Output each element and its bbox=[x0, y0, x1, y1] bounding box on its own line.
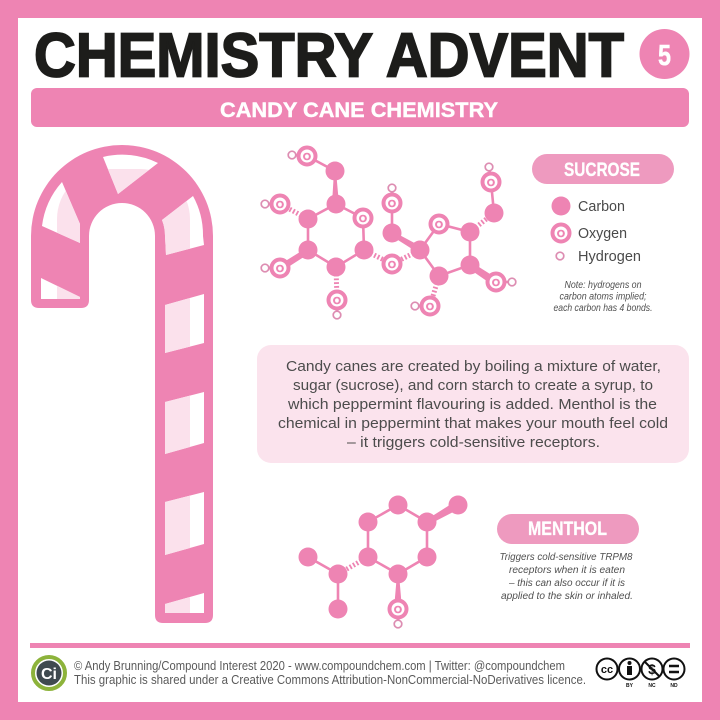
title: CHEMISTRY ADVENT bbox=[34, 20, 624, 90]
creative commons icons: NC bbox=[648, 683, 656, 689]
legend: oxygen bbox=[552, 224, 627, 242]
sucrose molecule: O bbox=[388, 259, 396, 271]
footer rule bbox=[30, 643, 690, 648]
description panel: – it triggers cold-sensitive receptors. bbox=[347, 434, 600, 451]
day number badge bbox=[640, 29, 690, 79]
menthol description bbox=[500, 552, 633, 602]
legend: oxygen: O bbox=[557, 228, 565, 240]
compound interest logo bbox=[33, 657, 65, 689]
subtitle banner: CANDY CANE CHEMISTRY bbox=[220, 99, 498, 122]
hydrogen note: Note: hydrogens on bbox=[564, 280, 642, 291]
description panel bbox=[257, 345, 689, 463]
legend: carbon: Carbon bbox=[578, 198, 625, 215]
sucrose molecule: O bbox=[303, 151, 311, 163]
sucrose molecule: O bbox=[426, 301, 434, 313]
sucrose molecule: O bbox=[333, 295, 341, 307]
credit text: © Andy Brunning/Compound Interest 2020 - www.compoundchem.com | Twitter: @compoundchem bbox=[74, 659, 565, 673]
menthol label pill bbox=[497, 514, 639, 544]
sucrose molecule: O bbox=[388, 198, 396, 210]
legend bbox=[552, 196, 641, 265]
menthol label pill: MENTHOL bbox=[528, 519, 607, 540]
sucrose molecule: O bbox=[435, 219, 443, 231]
candy cane illustration bbox=[31, 145, 213, 623]
compound interest logo: Ci bbox=[41, 666, 57, 683]
sucrose molecule: O bbox=[359, 213, 367, 225]
creative commons icons: cc bbox=[601, 664, 613, 676]
subtitle banner bbox=[31, 88, 689, 127]
day number badge: 5 bbox=[658, 40, 671, 72]
hydrogen note bbox=[554, 280, 652, 314]
menthol molecule bbox=[298, 496, 468, 628]
credit text: This graphic is shared under a Creative Commons Attribution-NonCommercial-NoDerivatives licence. bbox=[74, 673, 586, 687]
hydrogen note: each carbon has 4 bonds. bbox=[554, 303, 652, 314]
description panel: Candy canes are created by boiling a mixture of water, bbox=[286, 358, 661, 375]
sucrose label pill: SUCROSE bbox=[564, 160, 640, 181]
legend: oxygen: Oxygen bbox=[578, 225, 627, 242]
description panel: sugar (sucrose), and corn starch to create a syrup, to bbox=[293, 377, 653, 394]
menthol description: – this can also occur if it is bbox=[508, 578, 625, 589]
creative commons icons: ND bbox=[670, 683, 678, 689]
sucrose molecule bbox=[261, 148, 516, 319]
sucrose molecule: O bbox=[276, 199, 284, 211]
creative commons icons bbox=[596, 658, 684, 689]
sucrose molecule: O bbox=[487, 177, 495, 189]
hydrogen note: carbon atoms implied; bbox=[560, 292, 647, 302]
menthol description: Triggers cold-sensitive TRPM8 bbox=[500, 552, 633, 563]
sucrose molecule: O bbox=[492, 277, 500, 289]
creative commons icons: BY bbox=[626, 683, 634, 689]
menthol description: receptors when it is eaten bbox=[509, 565, 625, 576]
sucrose label pill bbox=[532, 154, 674, 184]
sucrose molecule: O bbox=[276, 263, 284, 275]
description panel: chemical in peppermint that makes your mouth feel cold bbox=[278, 415, 668, 432]
legend: hydrogen: Hydrogen bbox=[578, 248, 641, 265]
creative commons icons: $ bbox=[648, 661, 656, 677]
menthol molecule: O bbox=[394, 604, 402, 616]
menthol description: applied to the skin or inhaled. bbox=[501, 591, 633, 602]
credit text bbox=[74, 659, 586, 687]
description panel: which peppermint flavouring is added. Menthol is the bbox=[287, 396, 657, 413]
